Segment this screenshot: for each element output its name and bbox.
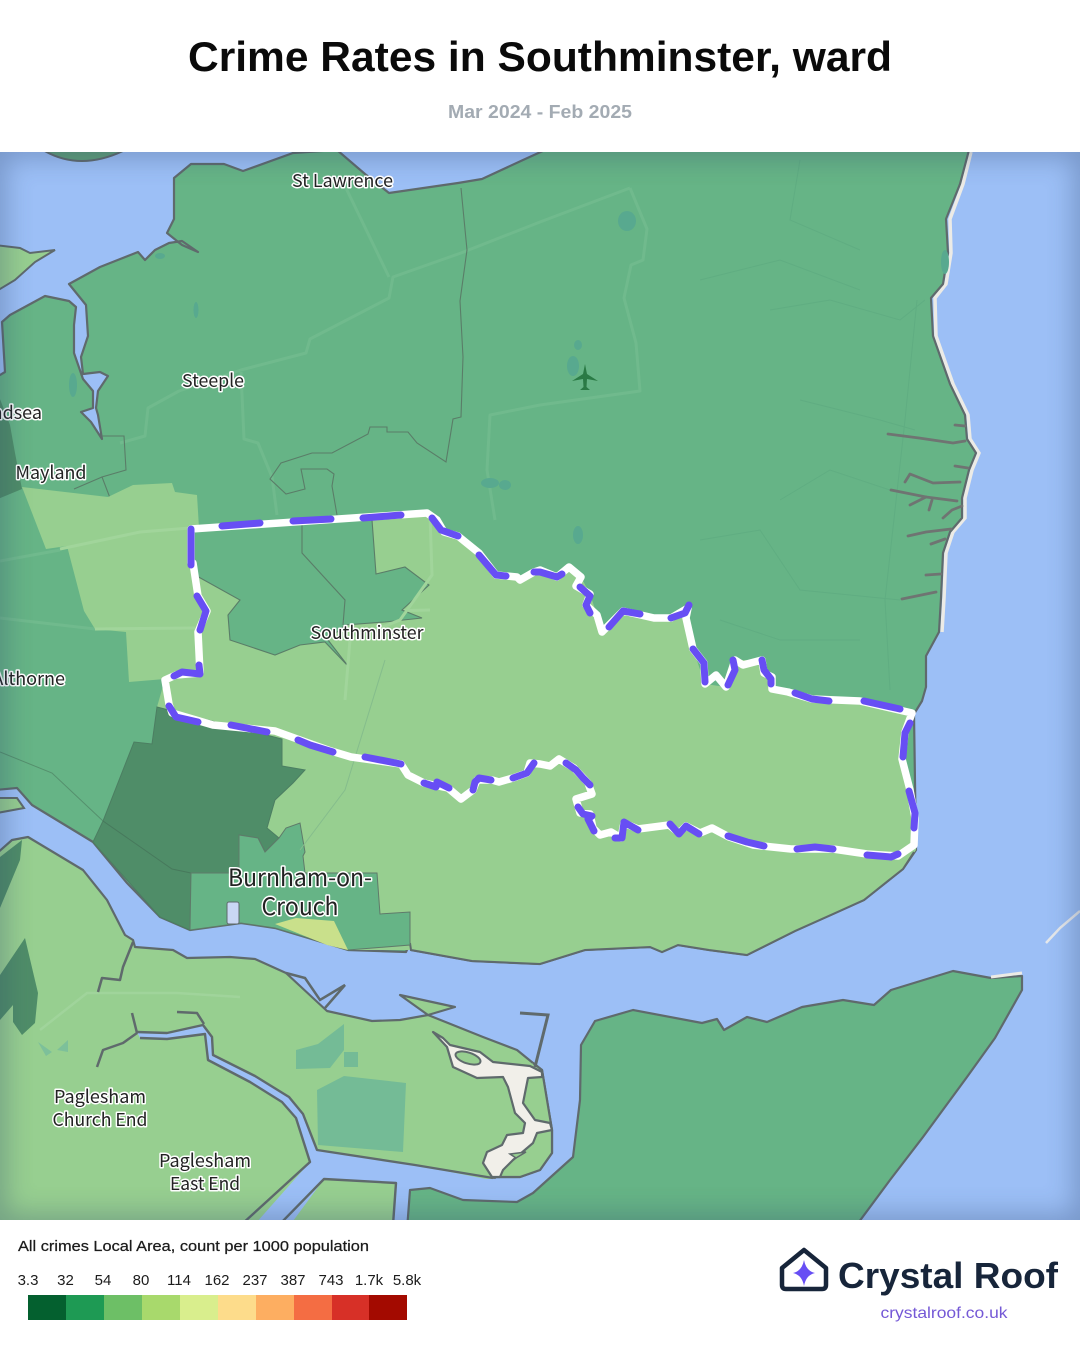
- local area boundaries: [74, 188, 467, 515]
- Roach river: [138, 1026, 516, 1220]
- logo: Crystal Roof: [782, 1250, 1059, 1322]
- place labels: East End: [170, 1170, 240, 1196]
- dark green high-band area: [93, 707, 305, 930]
- Burnham mid-green area: [190, 823, 410, 950]
- north land, mid-green crime band: [0, 150, 976, 964]
- yellow-green area on Burnham waterfront: [275, 918, 348, 950]
- place labels: Southminster: [310, 619, 425, 645]
- faint roads: [0, 184, 647, 629]
- place labels: [0, 167, 425, 1196]
- website: crystalroof.co.uk: [880, 1305, 1009, 1322]
- top-left island: [44, 152, 123, 162]
- place labels: Paglesham: [54, 1083, 146, 1109]
- icon: airfield plane: [572, 364, 598, 390]
- Roach river banks: [137, 1025, 493, 1225]
- faint field boundaries: [0, 752, 103, 821]
- small estuary islet: [400, 995, 455, 1015]
- legend values: 54: [95, 1272, 111, 1289]
- legend values: 743: [318, 1272, 344, 1289]
- ward boundary: white base: [165, 513, 915, 856]
- light green low-crime areas including ward: [22, 483, 917, 964]
- field ponds: [317, 1076, 406, 1152]
- wordmark: Crystal Roof: [838, 1255, 1059, 1296]
- place labels: Church End: [52, 1106, 148, 1132]
- place labels: Burnham-on-: [228, 858, 372, 893]
- south land: [0, 837, 552, 1230]
- Foulness island: [407, 971, 1022, 1230]
- legend values: 1.7k: [355, 1272, 384, 1289]
- east coast creeks: [888, 425, 968, 599]
- place labels: Crouch: [262, 887, 338, 922]
- east coast sand: [935, 152, 979, 632]
- west land spit: [0, 245, 55, 292]
- water patches: [69, 211, 949, 544]
- place labels: Mayland: [16, 459, 86, 485]
- offshore mud streak: [1046, 911, 1080, 943]
- legend values: 5.8k: [393, 1272, 422, 1289]
- legend values: 237: [242, 1272, 268, 1289]
- far-left dark strip: [0, 394, 22, 499]
- legend values: 114: [167, 1272, 191, 1289]
- light roads on ward: [345, 515, 432, 700]
- marina: [227, 902, 239, 924]
- north-west river bank island: [0, 798, 24, 813]
- legend values: 387: [280, 1272, 306, 1289]
- legend values: 162: [204, 1272, 230, 1289]
- legend values: [18, 1272, 422, 1289]
- place labels: Steeple: [182, 367, 244, 393]
- redraw of south coast line: [410, 852, 914, 964]
- sand flats on Wallasea: [433, 1032, 552, 1177]
- icon: house with star: [782, 1250, 826, 1289]
- dark wedges on south land: [0, 840, 22, 908]
- ward boundary: purple dashes: [169, 515, 915, 857]
- place labels: Paglesham: [159, 1147, 251, 1173]
- faint road across light area: [60, 528, 430, 629]
- faint road on south land: [40, 993, 240, 1030]
- legend values: 80: [133, 1272, 149, 1289]
- legend values: 32: [57, 1272, 74, 1289]
- Wallasea land east tip: [502, 1063, 551, 1176]
- legend: [18, 1238, 422, 1320]
- legend title: All crimes Local Area, count per 1000 population: [18, 1238, 369, 1255]
- jetty: [520, 1013, 548, 1067]
- place labels: St Lawrence: [292, 167, 393, 193]
- legend colour scale: [28, 1295, 407, 1320]
- creek branches south land: [97, 942, 204, 1067]
- title: Crime Rates in Southminster, ward: [188, 33, 892, 80]
- date range subtitle: Mar 2024 - Feb 2025: [448, 101, 632, 122]
- mid-green area inside ward: [191, 520, 429, 666]
- legend values: 3.3: [18, 1272, 38, 1289]
